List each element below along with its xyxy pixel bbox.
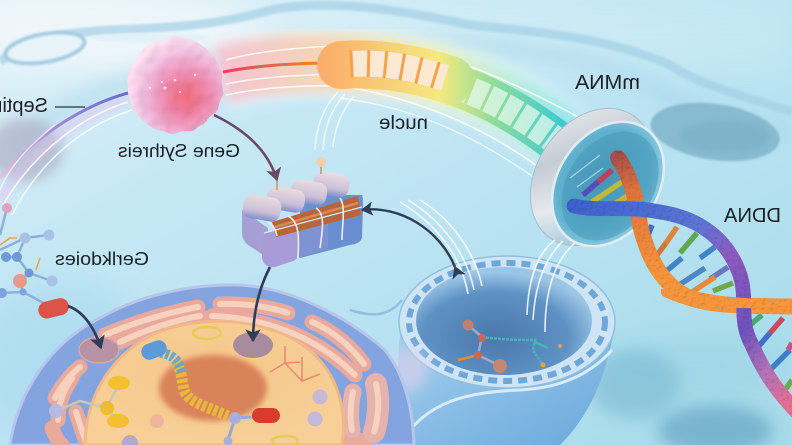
coil — [176, 362, 228, 416]
well organelle — [392, 256, 615, 445]
yellow molecule — [49, 376, 130, 428]
protein body — [300, 195, 363, 258]
nucleolus — [159, 355, 267, 421]
label: Gerlkdoies: Gerlkdoies — [55, 248, 149, 269]
right organelle — [647, 95, 783, 169]
sphere: gene synthesis — [127, 37, 223, 133]
rungs — [583, 170, 792, 390]
left faded organelle — [0, 118, 63, 182]
label line: Septin — [55, 106, 85, 108]
molecule upper left — [0, 203, 71, 320]
cell membrane: top band — [0, 5, 792, 150]
label: mMNA: mMNA — [574, 72, 640, 94]
docking pads — [79, 337, 119, 363]
DNA helix — [574, 158, 792, 415]
label: DDNA: DDNA — [724, 204, 781, 227]
lines under cylinder — [315, 92, 354, 150]
mRNA disc — [505, 85, 687, 269]
arrow: sphere to protein — [214, 115, 277, 180]
small vesicles — [122, 327, 328, 445]
nucleus cell — [10, 285, 414, 445]
mitochondria ring — [52, 304, 378, 445]
well shadow — [590, 350, 680, 420]
label: nucle: nucle — [379, 113, 428, 134]
rainbow glow band — [220, 45, 580, 178]
orange overlap — [668, 290, 792, 307]
blue strand — [574, 206, 792, 415]
lower right organelle — [657, 405, 773, 445]
central protein complex — [241, 157, 363, 267]
double arrow: protein and well — [362, 209, 455, 267]
orange strand — [618, 158, 792, 307]
glowing lines into well — [400, 200, 575, 332]
left curved lines — [0, 93, 132, 215]
nucleus interior — [85, 321, 344, 445]
molecule in well — [458, 320, 562, 373]
red molecule — [270, 346, 320, 381]
tube between nucleus and well — [350, 300, 402, 314]
arrow: pill to pad — [68, 306, 101, 348]
label: Gene Sythreis: Gene Sythreis — [118, 141, 240, 161]
arrow: protein to nucleus pad — [253, 267, 270, 341]
nucle cylinder and ribbon — [341, 64, 555, 140]
